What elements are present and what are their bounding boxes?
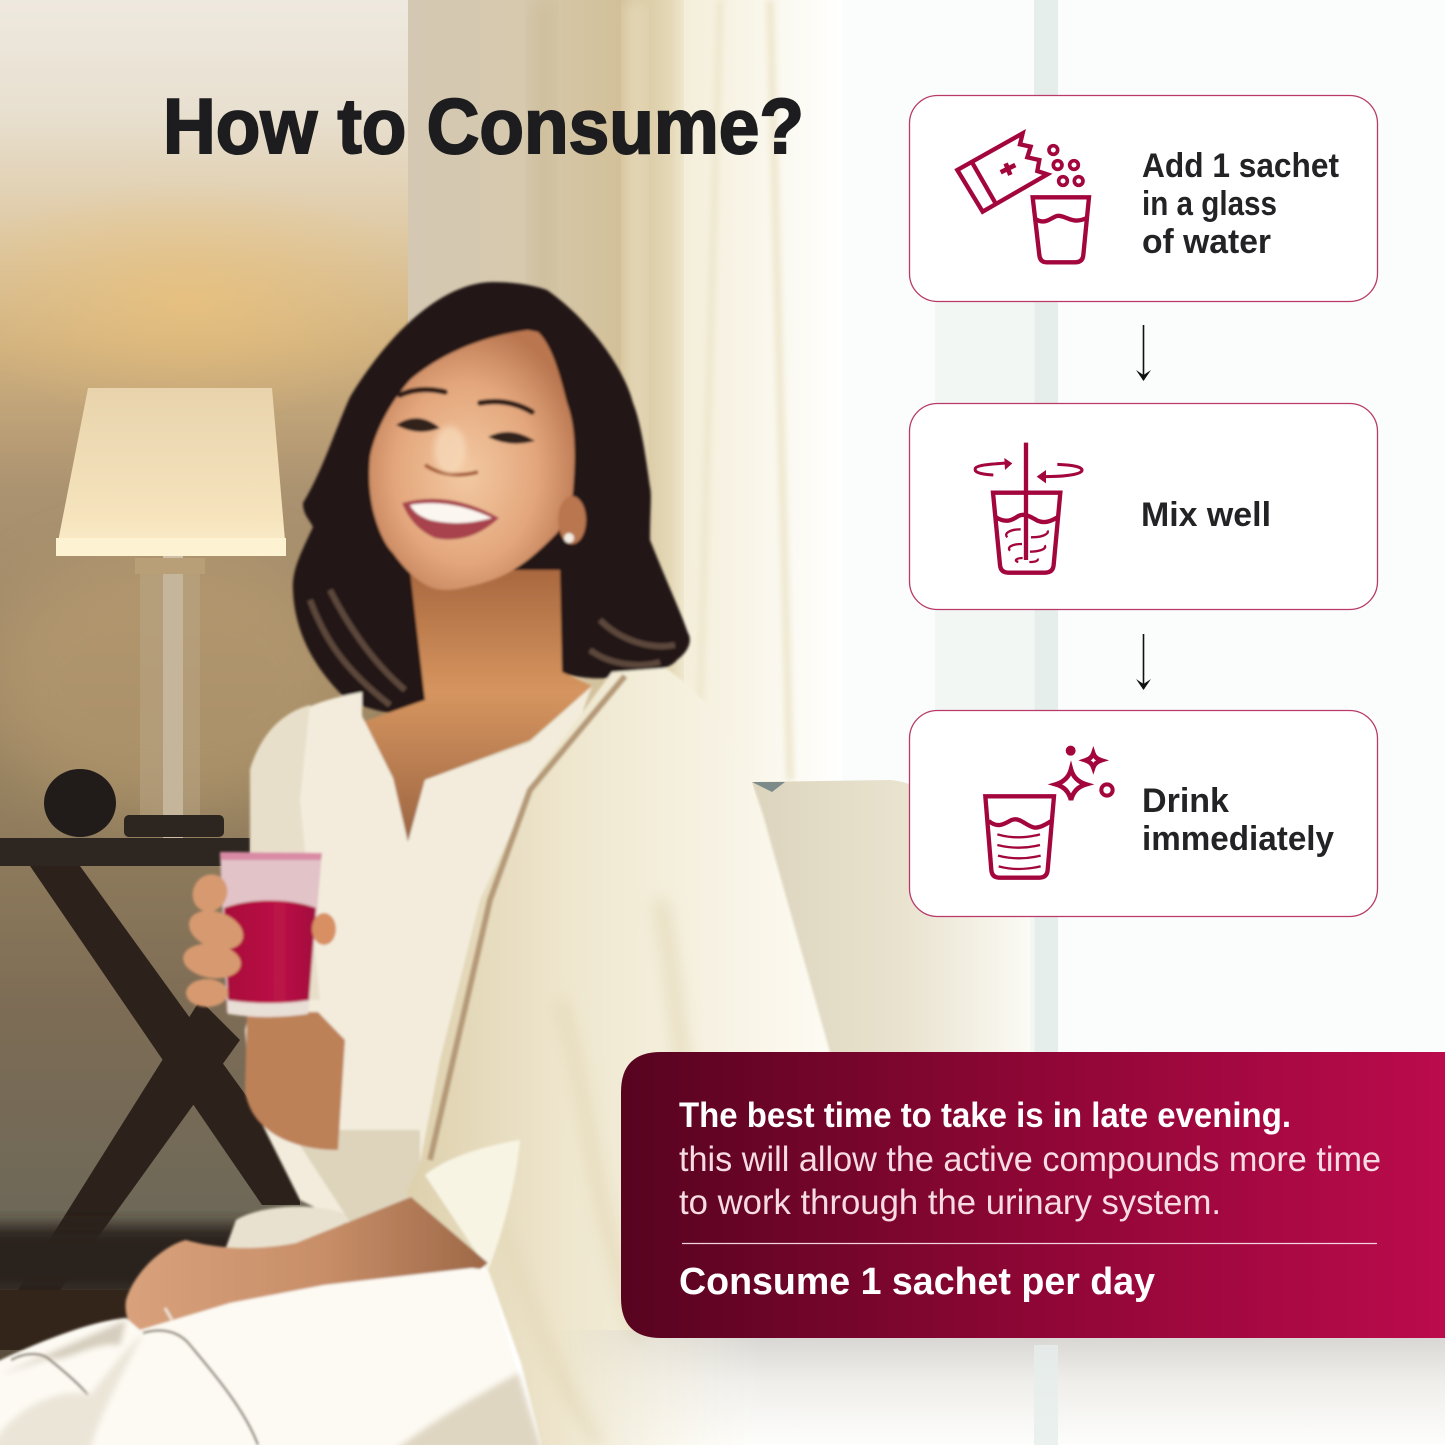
step card 1: add sachet	[910, 96, 1378, 302]
callout body text: to work through the urinary system.	[679, 1183, 1221, 1222]
ring	[165, 1308, 172, 1320]
smile	[402, 499, 499, 539]
label: immediately	[1142, 820, 1334, 858]
callout heading: The best time to take is in late evening.	[679, 1096, 1291, 1135]
side table with vase	[0, 769, 300, 1350]
eyebrows	[400, 390, 532, 412]
label: Drink	[1142, 782, 1229, 820]
icon: sachet and glass	[957, 133, 1089, 262]
bottom fade under panel	[540, 1330, 1445, 1445]
arrow 1	[1136, 325, 1151, 381]
ear	[558, 496, 586, 544]
label	[1142, 147, 1339, 261]
lower arm and hand on lap	[125, 1197, 488, 1335]
hair wave highlights	[310, 590, 675, 705]
icon: glass with sparkles	[985, 747, 1113, 878]
label	[1142, 782, 1334, 858]
panel: best time callout	[621, 1052, 1445, 1338]
lap trousers	[0, 1268, 548, 1445]
label: in a glass	[1142, 185, 1277, 223]
dosage text: Consume 1 sachet per day	[679, 1261, 1155, 1303]
earring	[564, 533, 574, 543]
step card 3: drink immediately	[910, 710, 1378, 916]
label: Add 1 sachet	[1142, 147, 1339, 185]
callout body text: this will allow the active compounds more time	[679, 1140, 1381, 1179]
thumb	[312, 913, 336, 945]
lamp	[56, 388, 286, 840]
forearm holding glass	[245, 1012, 345, 1150]
tunic	[245, 686, 592, 1230]
hair back	[293, 282, 690, 716]
icon: stirring glass	[975, 443, 1082, 573]
face	[369, 330, 575, 590]
step card 2: mix well	[910, 404, 1378, 610]
label: Mix well	[1141, 496, 1271, 534]
title: How to Consume?	[163, 82, 804, 170]
fingers	[181, 869, 248, 1007]
glass of juice	[220, 852, 322, 1017]
arrow 2	[1136, 634, 1151, 690]
woman	[0, 282, 830, 1445]
shawl	[406, 668, 830, 1445]
sofa	[752, 780, 1030, 1060]
neck and chest	[362, 570, 592, 842]
label: of water	[1142, 223, 1271, 261]
callout body text	[679, 1140, 1381, 1222]
nose	[425, 465, 478, 475]
eyes	[396, 418, 535, 444]
